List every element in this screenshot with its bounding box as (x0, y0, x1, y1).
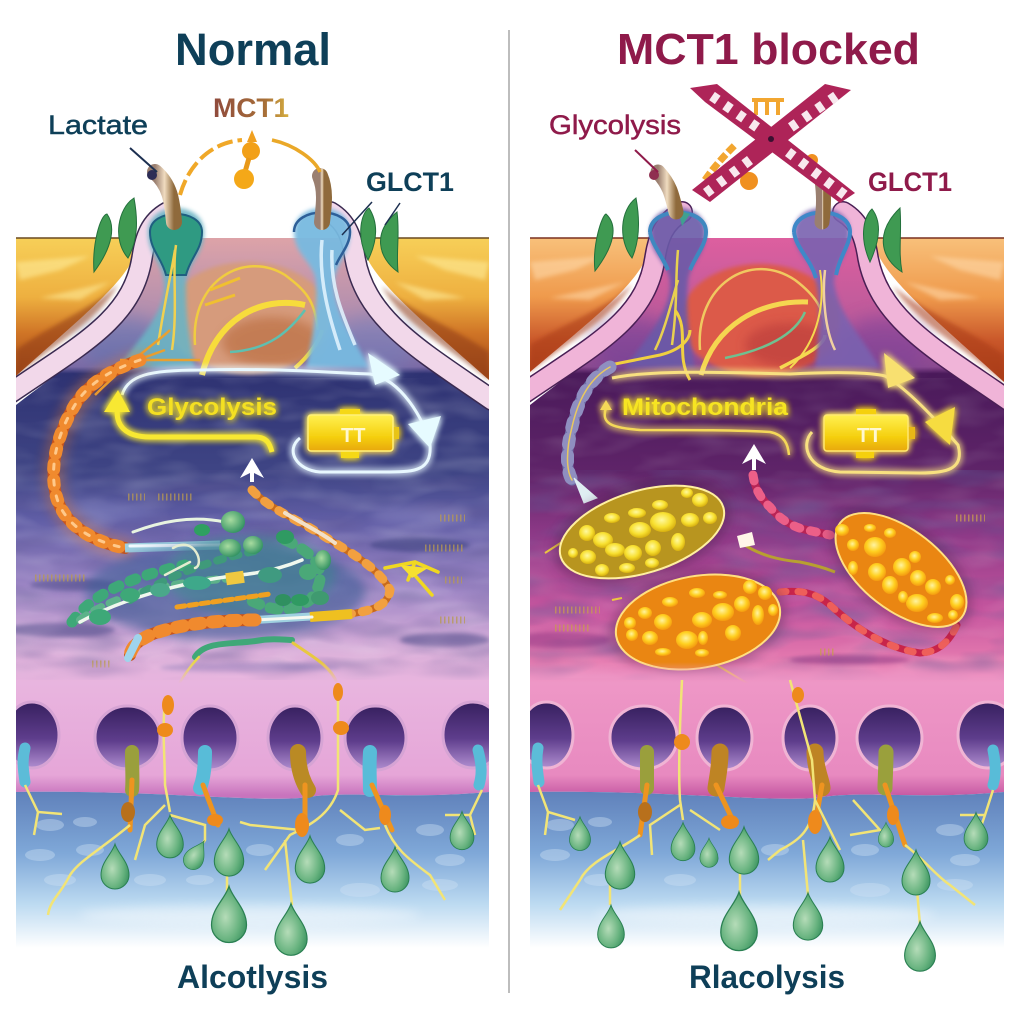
label: Glycolysis pathway: Glycolysis (147, 394, 277, 421)
mitochondrion: yellow (540, 459, 744, 605)
panel: MCT1 blocked (510, 84, 1018, 995)
divider between panels (508, 30, 510, 993)
transporter funnel: left teal (95, 208, 204, 395)
pathway: yellow loop with arrows (612, 353, 959, 473)
tissue: left orange (530, 238, 652, 372)
yellow branching vessels (25, 700, 482, 915)
green droplets (570, 812, 988, 971)
transporter funnel: left blue (610, 208, 706, 380)
tissue: right orange (872, 238, 1004, 382)
panel: normal (5, 93, 503, 995)
battery icon: TT (857, 425, 881, 447)
connector strands (545, 532, 835, 700)
label lines: GLCT1 (342, 202, 400, 235)
up arrow (742, 444, 766, 470)
blue lumen (16, 792, 489, 948)
membrane walls (6, 212, 492, 400)
battery icon: TT (341, 425, 365, 447)
blocked molecule behind X (705, 100, 818, 190)
leaf proteins: right (361, 208, 398, 272)
label line: Lactate (130, 148, 157, 172)
label: Glycolysis: Glycolysis (549, 110, 681, 140)
transporter funnel: right blue (790, 208, 880, 368)
transporter funnel: right blue (294, 208, 370, 368)
MCT1 transporter arc and molecule (180, 130, 320, 195)
label: GLCT1: GLCT1 (868, 167, 952, 197)
tissue: left yellow (16, 238, 140, 376)
villus tubes (537, 748, 995, 845)
leaf proteins: left (94, 198, 136, 272)
battery icon (308, 409, 399, 458)
small vesicle marks (35, 497, 465, 664)
yellow branching vessels (538, 680, 993, 925)
dome nucleus (166, 262, 330, 375)
green droplets (101, 811, 474, 955)
tissue: right yellow (360, 238, 489, 380)
label: Alcotlysis: Alcotlysis (177, 959, 328, 995)
title: Normal: Normal (175, 24, 331, 75)
label: Rlacolysis: Rlacolysis (689, 959, 845, 995)
label: Lactate: Lactate (48, 110, 148, 140)
orange rope through tangle (128, 490, 438, 658)
left orange rope (54, 360, 220, 548)
leaf proteins: left (594, 198, 639, 271)
title: MCT1 blocked: MCT1 blocked (617, 25, 920, 74)
villus tubes (23, 748, 481, 830)
battery icon (824, 409, 915, 458)
red rope lower (780, 591, 957, 653)
orange knots (638, 687, 899, 834)
up arrow (240, 458, 264, 482)
mitochondrion: orange right (806, 482, 996, 658)
tubes (649, 170, 824, 222)
label line: Glycolysis (635, 150, 658, 172)
pathway: white-blue loop with arrows (122, 353, 441, 472)
tubes (147, 170, 324, 222)
membrane walls (520, 212, 1008, 400)
leaf proteins: right (864, 208, 902, 272)
cell body background (5, 238, 490, 700)
cell body background (510, 238, 1004, 700)
label: GLCT1: GLCT1 (366, 167, 454, 197)
label: Mitochondria pathway: Mitochondria (622, 394, 789, 421)
pathway: thin yellow arrow (600, 400, 789, 455)
dome nucleus (680, 264, 840, 376)
left grey-blue rope (568, 367, 610, 503)
epithelial band with holes (5, 662, 503, 799)
green tangle (72, 511, 365, 697)
orange knots (121, 683, 391, 837)
pathway: yellow arrow (104, 390, 272, 452)
blue lumen (530, 792, 1004, 948)
small vesicle marks (555, 518, 985, 652)
red rope upper (753, 475, 830, 535)
blocked X mark (690, 84, 855, 203)
label: MCT1: MCT1 (213, 93, 289, 123)
epithelial band with holes (520, 662, 1018, 799)
mitochondrion: orange lower (600, 555, 796, 689)
